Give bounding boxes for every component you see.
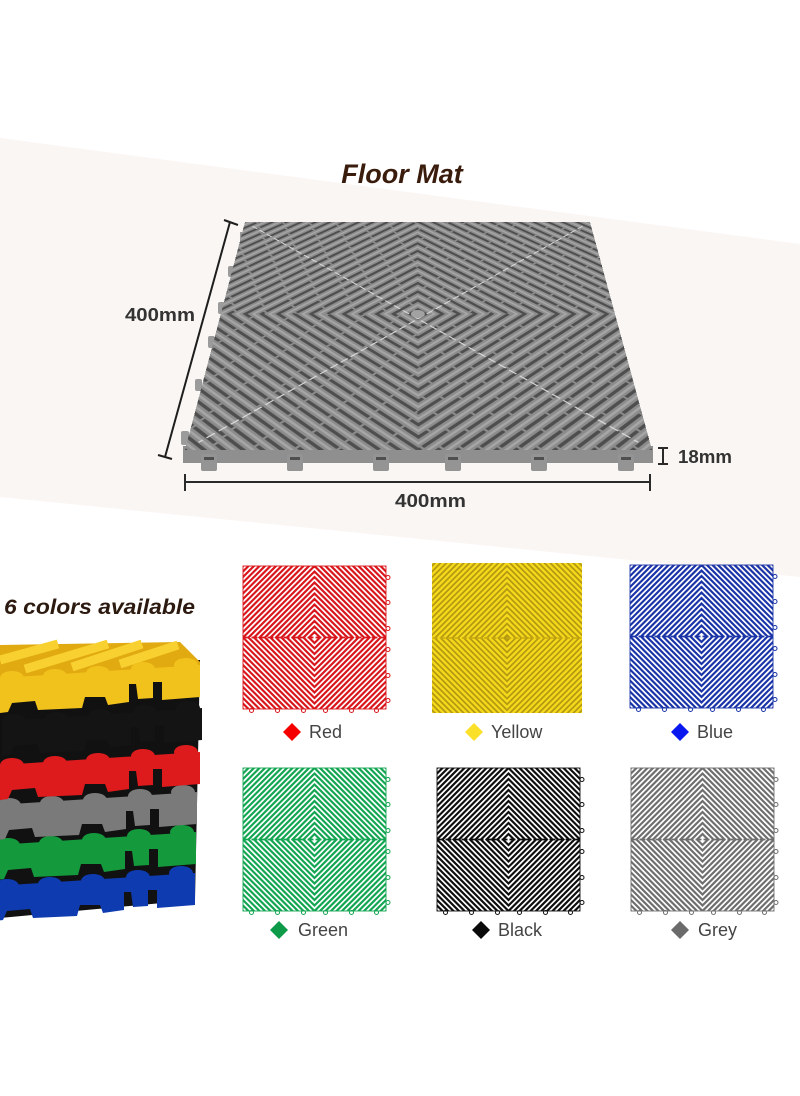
legend: yellow: Yellow	[491, 722, 543, 742]
layer: yellow	[0, 642, 200, 713]
layer: blue	[0, 866, 195, 921]
legend: green: Green	[298, 920, 348, 940]
dimension: bottom 400mm: 400mm	[395, 491, 466, 511]
layer: black	[2, 701, 202, 756]
tile: red	[172, 494, 458, 780]
legend: red: Red	[309, 722, 342, 742]
legend: blue	[671, 722, 733, 742]
tile: yellow	[357, 488, 657, 788]
layer: grey	[0, 785, 197, 840]
dimension: left 400mm: 400mm	[125, 305, 195, 325]
legend: grey	[671, 920, 737, 940]
legend: green	[270, 920, 348, 940]
legend: black	[472, 920, 543, 940]
legend: yellow	[465, 722, 543, 742]
tile: black	[366, 696, 652, 982]
title: Floor Mat	[341, 159, 464, 189]
tile: grey	[560, 696, 800, 982]
legend: red	[283, 722, 342, 742]
dimension: 18mm height: 18mm	[678, 447, 732, 467]
layer: red	[0, 745, 200, 800]
colour tile swatches	[242, 563, 778, 915]
heading: 6 colors available: 6 colors available	[4, 596, 195, 619]
dimension: left 400mm	[125, 220, 238, 459]
floor mat tile in perspective	[185, 222, 652, 450]
layer: green	[0, 825, 196, 880]
legend: blue: Blue	[697, 722, 733, 742]
tile: blue	[558, 494, 800, 780]
legend: black: Black	[498, 920, 543, 940]
tile: green	[172, 696, 458, 982]
legend: grey: Grey	[698, 920, 737, 940]
dimension: bottom 400mm	[185, 474, 650, 511]
